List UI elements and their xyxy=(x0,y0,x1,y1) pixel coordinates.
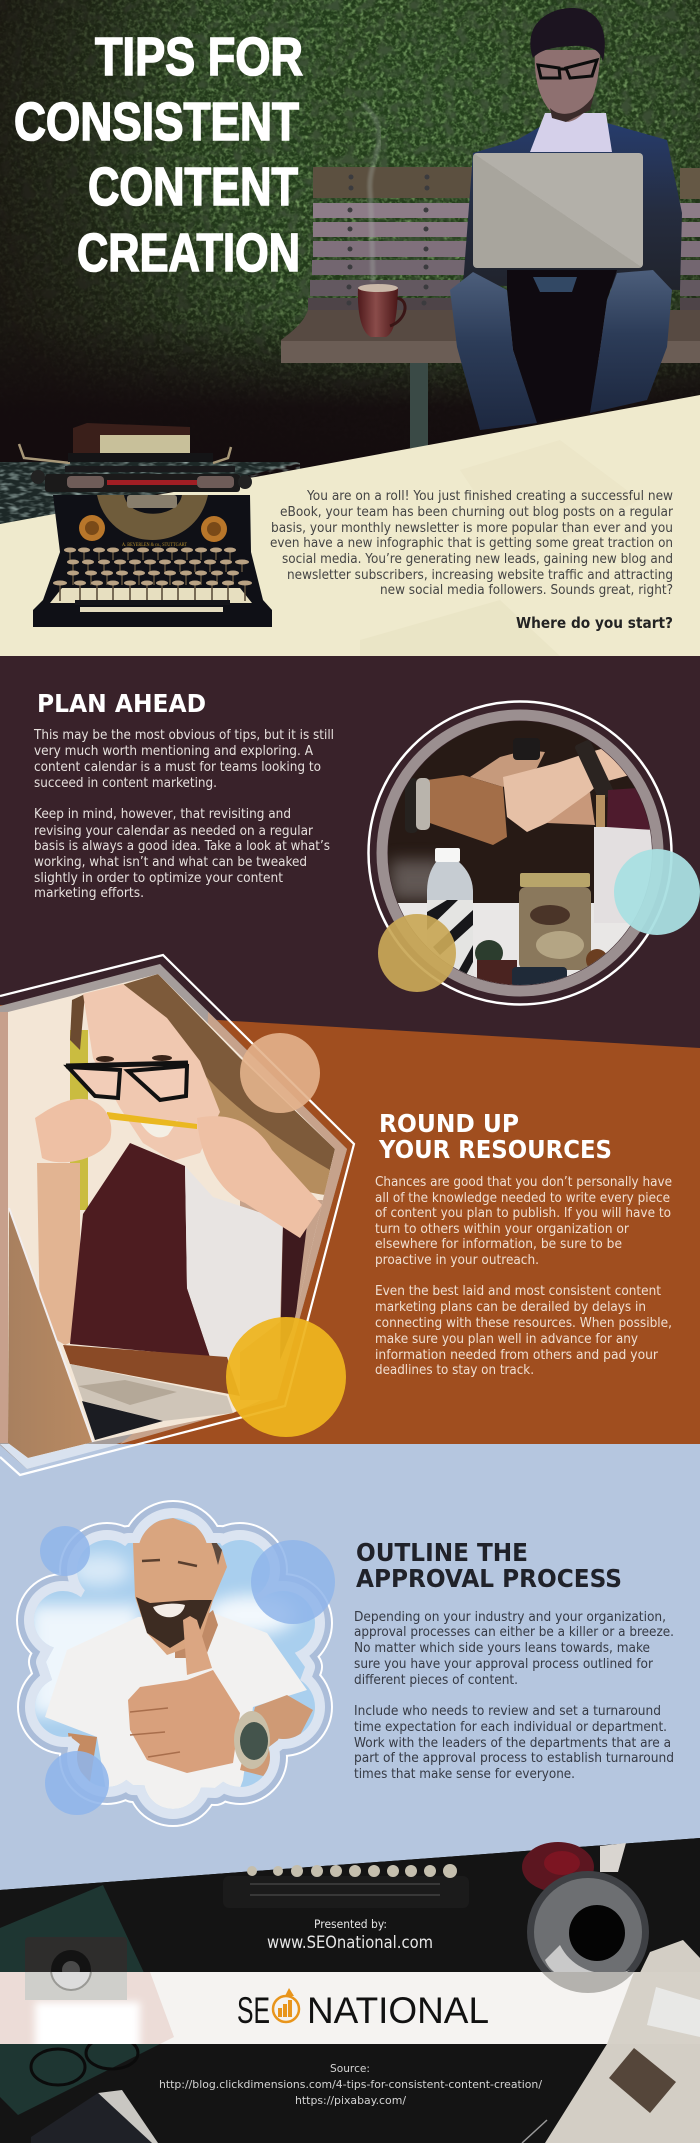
text block: round up body: proactive in your outreach. xyxy=(375,1253,539,1268)
text: presented by xyxy=(267,1917,433,1953)
text block: approval body: Depending on your industry and your organization, xyxy=(354,1610,666,1625)
bracelets xyxy=(405,778,430,833)
bench leg xyxy=(410,363,428,448)
text block: approval body: time expectation for each individual or department. xyxy=(354,1720,667,1735)
text block: round up body: information needed from others and pad your xyxy=(375,1348,659,1363)
illustration: book xyxy=(73,423,190,462)
text block: round up body: connecting with these resources. When possible, xyxy=(375,1316,672,1331)
illustration: woman biting pencil photo xyxy=(0,955,354,1475)
sky xyxy=(34,1518,315,1809)
illustration: typewriter xyxy=(19,444,272,627)
text block: approval body: part of the approval process to establish turnaround xyxy=(354,1751,674,1766)
keyboard xyxy=(82,1401,163,1440)
desk coffee cup xyxy=(527,1871,649,1993)
typewriter cream gap xyxy=(50,588,252,603)
laptop deck xyxy=(70,1364,233,1421)
text block: approval body xyxy=(354,1610,674,1782)
photo frame xyxy=(0,964,347,1469)
bench seat xyxy=(281,310,700,363)
title: CREATION xyxy=(77,223,300,283)
text block: round up body xyxy=(375,1175,672,1378)
mouth xyxy=(140,1120,178,1137)
plant pot and lid xyxy=(475,940,608,987)
intro text: You are on a roll! You just finished creating a successful new xyxy=(306,489,673,504)
panel: hero background xyxy=(0,0,700,524)
panel: plan ahead background xyxy=(0,656,700,1056)
panel: approval process blue background xyxy=(0,1444,700,1890)
glasses xyxy=(68,1066,187,1100)
typewriter dial xyxy=(97,495,208,540)
t-shirt xyxy=(45,1613,307,1815)
intro text xyxy=(270,489,674,598)
text block: approval body: sure you have your approval process outlined for xyxy=(354,1657,654,1672)
logo: SEO National xyxy=(237,1988,489,2031)
heading: round up your resources xyxy=(378,1109,612,1164)
hand left xyxy=(35,1099,111,1162)
desk plate and rose xyxy=(522,1842,626,1892)
text block: round up body: make sure you plan well in advance for any xyxy=(375,1332,638,1347)
laptop screen xyxy=(8,1210,93,1458)
shirt xyxy=(185,1166,283,1360)
title xyxy=(14,27,303,283)
callout: where do you start: Where do you start? xyxy=(516,614,673,632)
typewriter maker label: A. BEYERLEN & co., STUTTGART xyxy=(122,543,187,548)
band camera ghost xyxy=(25,1950,127,2000)
text block: plan ahead body xyxy=(33,728,334,901)
beard xyxy=(136,1597,212,1648)
panel: round up orange background xyxy=(0,1005,700,1444)
typewriter carriage xyxy=(31,453,252,492)
left arm xyxy=(68,1733,97,1782)
band card ghost xyxy=(647,1987,700,2037)
steam xyxy=(363,103,379,282)
title: TIPS FOR xyxy=(95,27,303,87)
hair xyxy=(72,974,335,1190)
peach circle xyxy=(240,1033,320,1113)
illustration: man on bench with laptop and coffee xyxy=(281,8,700,448)
text block: approval body: approval processes can either be a killer or a breeze. xyxy=(354,1625,674,1640)
eyes xyxy=(96,1055,172,1062)
text block: round up body: Chances are good that you don’t personally have xyxy=(375,1175,672,1190)
frame outline xyxy=(0,955,354,1475)
mouth xyxy=(153,1604,185,1617)
bench bolts xyxy=(346,174,430,306)
text: presented by: Presented by: xyxy=(314,1917,387,1931)
text block: plan ahead body: Keep in mind, however, that revisiting and xyxy=(34,807,291,822)
coffee cup xyxy=(358,103,405,337)
forearm left xyxy=(37,1163,80,1345)
desk glasses xyxy=(31,2037,138,2085)
table xyxy=(63,1345,240,1396)
pencil xyxy=(107,1112,197,1129)
teal circle xyxy=(614,849,700,935)
cardigan xyxy=(70,1143,210,1357)
title: CONTENT xyxy=(88,157,298,217)
text block: round up body: all of the knowledge needed to write every piece xyxy=(375,1191,670,1206)
man jacket xyxy=(463,123,682,290)
watch xyxy=(234,1711,270,1769)
bench back slats xyxy=(308,167,700,310)
panel: footer desk background xyxy=(0,1838,700,2143)
heading: outline the approval process xyxy=(356,1538,622,1593)
table and curtain xyxy=(398,903,632,985)
logo: SEO National: NATIONAL xyxy=(307,1990,489,2031)
text block: approval body: different pieces of content. xyxy=(354,1673,518,1688)
heading: round up your resources: ROUND UP xyxy=(379,1109,519,1138)
head xyxy=(535,50,600,122)
heading: outline the approval process: APPROVAL PROCESS xyxy=(356,1564,622,1593)
typewriter key stems xyxy=(60,550,245,601)
text block: plan ahead body: slightly in order to optimize your content xyxy=(34,871,283,886)
intro text: basis, your monthly newsletter is more popular than ever and you xyxy=(271,521,673,536)
watch strap xyxy=(575,740,613,798)
typewriter keys xyxy=(53,548,252,586)
desk stamp xyxy=(609,2048,676,2113)
band cup ghost xyxy=(527,1871,649,1993)
jeans xyxy=(450,270,672,430)
illustration: thumbs up man photo xyxy=(17,1500,337,1830)
band notebook ghost xyxy=(0,1972,174,2044)
text: presented by: www.SEOnational.com xyxy=(267,1933,433,1953)
text block: plan ahead body: This may be the most obvious of tips, but it is still xyxy=(33,728,334,743)
face xyxy=(83,984,220,1161)
shirt xyxy=(530,113,612,152)
title: CONSISTENT xyxy=(14,92,299,152)
text block: round up body: elsewhere for information, be sure to be xyxy=(375,1237,622,1252)
heading: round up your resources: YOUR RESOURCES xyxy=(378,1135,612,1164)
text block: plan ahead body: working, what isn’t and what can be tweaked xyxy=(34,855,307,870)
sleeve xyxy=(607,787,653,830)
typewriter levers xyxy=(19,444,231,463)
text: source xyxy=(159,2062,542,2107)
text block: round up body: deadlines to stay on track. xyxy=(375,1363,534,1378)
text block: plan ahead body: succeed in content marketing. xyxy=(34,776,217,791)
intro text: newsletter subscribers, increasing website traffic and attracting xyxy=(287,568,673,583)
heading: plan ahead: PLAN AHEAD xyxy=(37,689,206,718)
text block: plan ahead body: basis is always a good idea. Take a look at what’s xyxy=(34,839,330,854)
fist right xyxy=(503,745,630,832)
blue circles xyxy=(40,1526,90,1576)
right forearm xyxy=(240,1695,313,1777)
text block: plan ahead body: very much worth mentioning and exploring. A xyxy=(34,744,313,759)
text block: plan ahead body: content calendar is a must for teams looking to xyxy=(34,760,321,775)
water bottle xyxy=(427,848,473,977)
text block: round up body: turn to others within your organization or xyxy=(375,1222,630,1237)
typewriter spacebar xyxy=(75,600,230,612)
heading: outline the approval process: OUTLINE THE xyxy=(356,1538,528,1567)
text block: round up body: Even the best laid and most consistent content xyxy=(375,1284,661,1299)
text block: approval body: No matter which side yours leans towards, make xyxy=(354,1641,650,1656)
text: source: Source: xyxy=(330,2062,370,2075)
text block: approval body: times that make sense for everyone. xyxy=(354,1767,575,1782)
desk typewriter xyxy=(223,1864,469,1908)
intro text: social media. You’re generating new leads, gaining new blog and xyxy=(282,552,673,567)
hand right xyxy=(197,1116,322,1238)
desk book xyxy=(31,2090,158,2143)
jar xyxy=(519,873,591,970)
text block: plan ahead body: marketing efforts. xyxy=(34,886,144,901)
thumb xyxy=(183,1616,212,1675)
text block: round up body: of content you plan to publish. If you will have to xyxy=(375,1206,671,1221)
typewriter badges xyxy=(79,515,227,542)
wall xyxy=(0,960,350,1460)
panel: intro beige band xyxy=(0,395,700,656)
panel: white logo band xyxy=(0,1871,700,2052)
text block: plan ahead body: revising your calendar as needed on a regular xyxy=(34,824,314,839)
logo: SEO National: SE xyxy=(237,1990,270,2031)
illustration: circular team photo xyxy=(368,702,700,1004)
arm left xyxy=(427,775,507,845)
intro text: new social media followers. Sounds great, right? xyxy=(380,583,673,598)
text: source: https://pixabay.com/ xyxy=(295,2094,406,2107)
yellow circle xyxy=(226,1317,346,1437)
text block: round up body: marketing plans can be derailed by delays in xyxy=(375,1300,646,1315)
text block: approval body: Include who needs to review and set a turnaround xyxy=(354,1704,661,1719)
desk camera xyxy=(25,1937,127,2000)
text block: approval body: Work with the leaders of the departments that are a xyxy=(354,1736,671,1751)
glasses xyxy=(538,60,597,78)
desk paper xyxy=(545,1940,700,2143)
text: source: http://blog.clickdimensions.com/4-tips-for-consistent-content-creation/ xyxy=(159,2078,542,2091)
desk notebook xyxy=(0,1885,174,2115)
fist xyxy=(128,1670,240,1773)
laptop xyxy=(473,153,643,268)
typewriter body xyxy=(33,495,272,627)
intro text: eBook, your team has been churning out blog posts on a regular xyxy=(280,505,674,520)
arm back xyxy=(470,750,545,787)
head xyxy=(133,1518,227,1655)
neck xyxy=(175,1610,218,1658)
gold circle xyxy=(378,914,456,992)
desk pen xyxy=(522,2120,547,2143)
brows xyxy=(142,1560,197,1566)
